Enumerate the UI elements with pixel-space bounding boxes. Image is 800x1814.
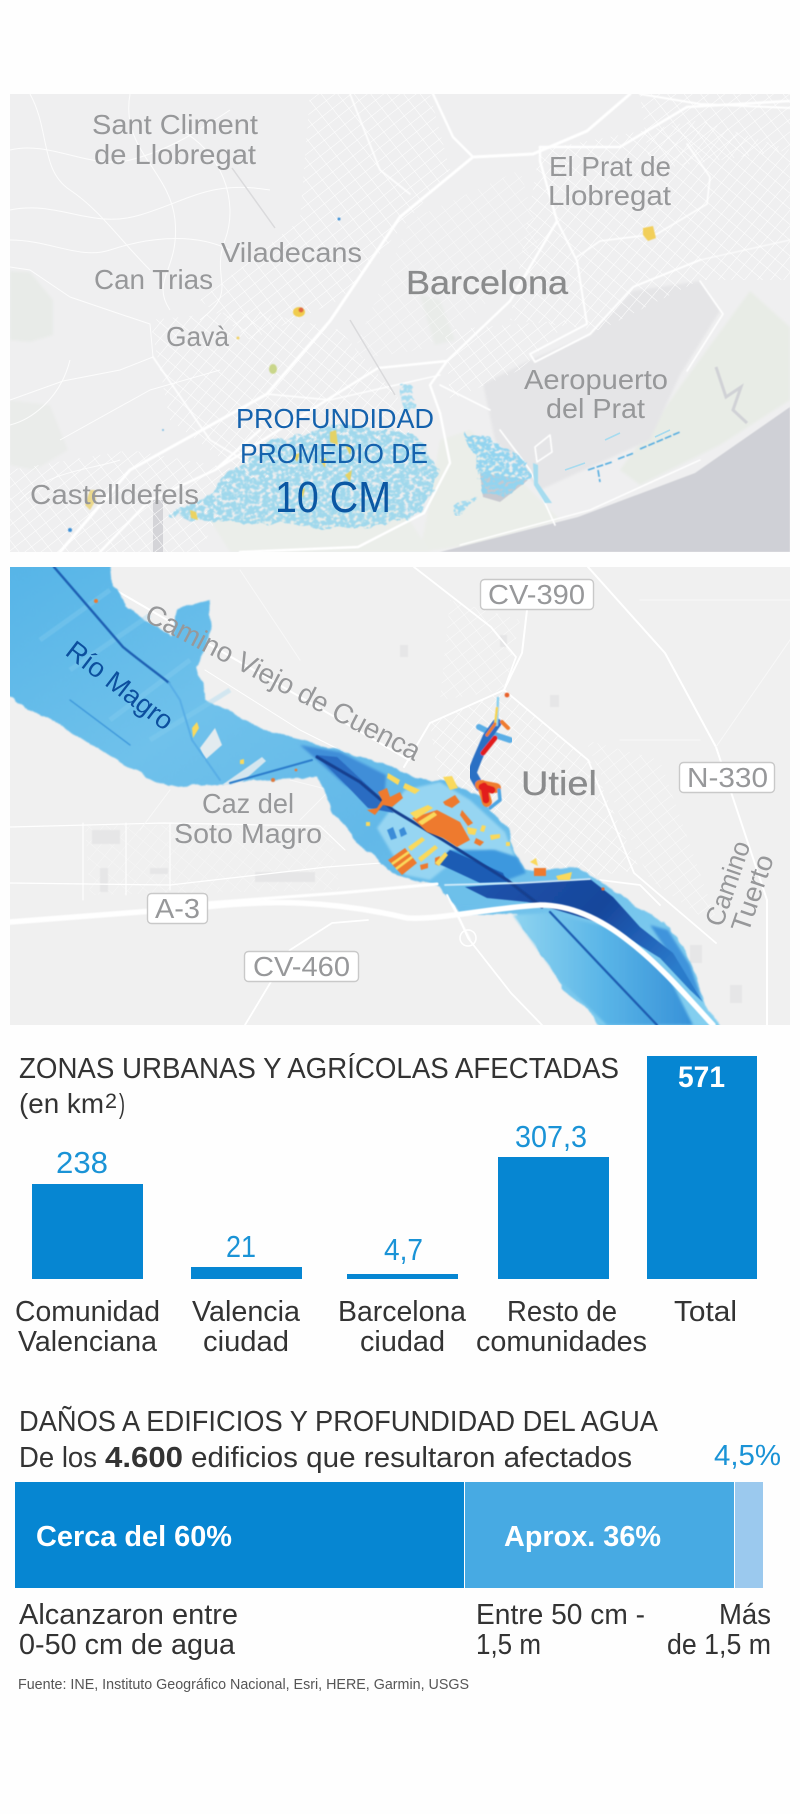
labels: depth ranges: 1,5 m	[476, 1629, 541, 1661]
main roads	[60, 94, 790, 552]
segment: 50 cm - 1,5 m: Aprox. 36%	[504, 1521, 661, 1553]
road badge: A-3: A-3	[155, 893, 200, 924]
bar: Barcelona ciudad: 4,7	[384, 1232, 423, 1267]
heading: building damage: De los	[19, 1442, 97, 1474]
urban flood vein	[472, 698, 510, 808]
callout: average depth: PROMEDIO DE	[240, 438, 428, 469]
labels: depth ranges	[19, 1599, 771, 1661]
labels: depth ranges: de 1,5 m	[667, 1629, 771, 1661]
labels: depth ranges: Alcanzaron entre	[19, 1599, 238, 1631]
flood patches	[167, 383, 680, 527]
yellow blocks	[192, 722, 572, 880]
map labels: Can Trias	[94, 264, 213, 295]
map labels: El Prat de	[549, 151, 671, 182]
callout: average depth: 10 CM	[275, 473, 391, 522]
map labels: Soto Magro	[174, 818, 322, 849]
road badge: N-330: N-330	[687, 762, 768, 793]
bar: Comunidad Valenciana	[15, 1145, 160, 1358]
gray rail line	[232, 168, 395, 395]
stacked bar: water depth	[15, 1440, 781, 1588]
bar: Barcelona ciudad: ciudad	[360, 1326, 445, 1358]
segment: 0-50 cm: Cerca del 60%	[36, 1521, 232, 1553]
secondary roads	[10, 567, 790, 1025]
bar: Resto de comunidades: 307,3	[515, 1119, 587, 1154]
panel: Barcelona map	[10, 94, 790, 552]
map labels: Aeropuerto	[524, 364, 668, 395]
segment: over 1,5 m	[714, 1440, 781, 1588]
hill roads	[10, 94, 270, 500]
heading: building damage: 4.600	[105, 1442, 183, 1474]
blue blocks	[387, 827, 407, 840]
map labels	[30, 109, 671, 510]
map labels: Camino Viejo de Cuenca	[140, 598, 426, 767]
bar: Valencia ciudad: ciudad	[203, 1326, 289, 1358]
bar: Total: 571	[678, 1061, 725, 1094]
striped block	[388, 848, 417, 875]
bar: Comunidad Valenciana: Valenciana	[18, 1326, 158, 1358]
map labels: Camino	[699, 837, 756, 930]
map labels: Tuerto	[725, 851, 780, 936]
callout: average depth: PROFUNDIDAD	[236, 403, 434, 434]
white highway over flood	[10, 879, 713, 1025]
map labels: Caz del	[202, 788, 294, 819]
heading: affected zones: )	[119, 1088, 125, 1119]
heading: building damage: DAÑOS A EDIFICIOS Y PROFUNDIDAD DEL AGUA	[19, 1404, 659, 1438]
bar: Valencia ciudad	[191, 1229, 302, 1358]
flooded buildings	[94, 599, 605, 891]
callout: average depth	[238, 408, 433, 512]
bar: Barcelona ciudad: Barcelona	[338, 1296, 467, 1328]
labels: depth ranges: Entre 50 cm -	[476, 1599, 645, 1631]
flood: deepest zones	[316, 755, 703, 1002]
airport area	[483, 281, 720, 490]
map labels: Llobregat	[548, 180, 671, 211]
heading: affected zones: ZONAS URBANAS Y AGRÍCOLAS AFECTADAS	[19, 1052, 619, 1085]
white gaps in flood	[200, 728, 266, 785]
rivers	[54, 567, 657, 1025]
labels: depth ranges: Más	[719, 1599, 771, 1631]
bar: Total	[647, 1056, 757, 1328]
bar chart: affected area	[15, 1056, 757, 1358]
segment: 0-50 cm	[15, 1482, 464, 1588]
bar: Valencia ciudad: Valencia	[192, 1296, 301, 1328]
runway strip	[153, 500, 163, 552]
heading: affected zones	[19, 1052, 619, 1119]
map labels	[140, 598, 780, 936]
map labels: Gavà	[166, 321, 229, 352]
urban street texture	[10, 94, 790, 552]
bar: Valencia ciudad: 21	[226, 1229, 256, 1264]
panel: Utiel map	[4, 558, 790, 1032]
bar: Comunidad Valenciana: Comunidad	[15, 1296, 160, 1328]
bar: Resto de comunidades: Resto de	[507, 1296, 617, 1328]
flood: stripes on plain	[40, 590, 230, 740]
label: Barcelona: Barcelona	[406, 264, 569, 301]
orange blocks	[367, 788, 546, 876]
map labels: de Llobregat	[94, 139, 256, 170]
road badge: CV-460: CV-460	[253, 951, 350, 982]
segment: over 1,5 m: 4,5%	[714, 1440, 781, 1472]
label: Río Magro: Río Magro	[60, 635, 179, 736]
flood: medium depth	[300, 745, 702, 1000]
lagoon	[716, 367, 747, 423]
map labels: del Prat	[546, 393, 645, 424]
map labels: Viladecans	[221, 237, 362, 268]
flood: lower plain	[513, 913, 693, 1025]
sea	[440, 407, 790, 552]
heading: building damage	[19, 1404, 659, 1474]
flood: light town zone	[377, 782, 515, 880]
label: Utiel: Utiel	[521, 765, 597, 803]
segment: 50 cm - 1,5 m	[465, 1482, 734, 1588]
small orange spots	[94, 599, 98, 603]
heading: affected zones: (en km	[19, 1088, 104, 1119]
map labels: Sant Climent	[92, 109, 258, 140]
source note: Fuente: INE, Instituto Geográfico Nacional, Esri, HERE, Garmin, USGS	[18, 1676, 469, 1693]
heading: affected zones: 2	[105, 1090, 117, 1113]
labels: depth ranges: 0-50 cm de agua	[19, 1629, 236, 1661]
heading: building damage: edificios que resultaron afectados	[191, 1442, 632, 1474]
bar: Resto de comunidades: comunidades	[476, 1326, 647, 1358]
flood: main river plain	[4, 558, 725, 1032]
building blocks	[92, 635, 742, 1003]
town street texture	[85, 600, 720, 930]
map labels: Castelldefels	[30, 479, 199, 510]
bar: Total: Total	[674, 1296, 737, 1328]
flood hotspots	[68, 218, 656, 532]
map land patches	[622, 294, 788, 483]
road badge: CV-390: CV-390	[488, 579, 585, 610]
bar: Resto de comunidades	[476, 1119, 647, 1358]
bar: Comunidad Valenciana: 238	[56, 1145, 108, 1180]
bar: Barcelona ciudad	[338, 1232, 467, 1358]
